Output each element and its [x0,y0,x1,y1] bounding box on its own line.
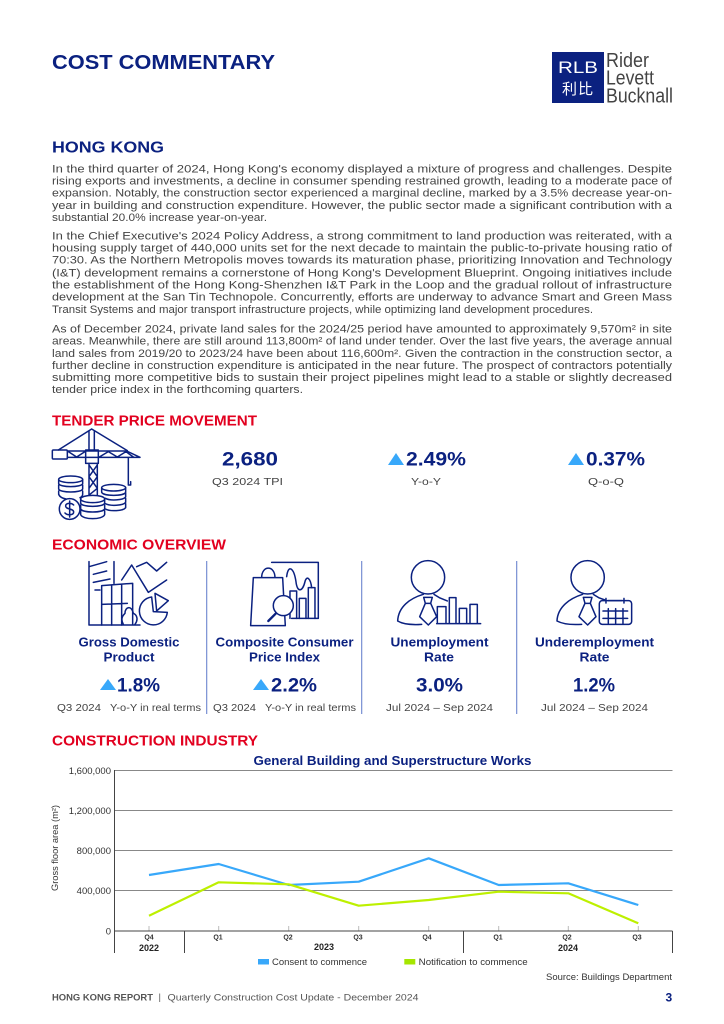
period: Jul 2024 – Sep 2024 [386,702,493,714]
stat: year on year [388,450,466,488]
footer: | [158,992,161,1003]
legend [258,957,528,968]
label: Rate [580,650,610,664]
y axis labels [69,766,111,938]
label [216,636,354,664]
label: Unemployment [390,636,489,650]
text block: paragraph 2: 70:30. As the Northern Metropolis moves towards its maturation phase, prioritizing Innovation and Technology [52,255,673,267]
panel: composite consumer price index [213,562,356,714]
logo: Rider Levett Bucknall: 利比 [562,81,593,98]
panel: underemployment rate [535,561,655,714]
label [78,636,180,664]
x axis labels: Q2 [562,934,572,942]
value: 1.8% [117,676,160,696]
icon: person with calendar [557,561,632,625]
year labels: 2022 [139,943,159,953]
series: consent to commence [149,858,638,905]
value: 3.0% [416,676,463,696]
text block: paragraph 1: rising exports and investments, a decline in consumer spending restrained growth, leading to a moderate pace of [52,176,673,188]
logo: Rider Levett Bucknall: Levett [606,68,654,90]
logo: Rider Levett Bucknall: RLB [558,59,598,77]
value [253,676,317,696]
footer: Quarterly Construction Cost Update - December 2024 [168,992,418,1004]
y axis labels: 0 [106,926,111,938]
chart: general building and superstructure works [50,754,672,968]
text block: paragraph 3: tender price index in the forthcoming quarters. [52,384,303,396]
label: Rate [424,650,454,664]
text block: paragraph 2: housing supply target of 440,000 units set for the next decade to maintain the public-to-private housing ratio of [52,243,673,255]
x axis labels [144,934,642,942]
x axis labels: Q4 [422,934,432,942]
text block: paragraph 1: year in building and construction expenditure. However, the public sector made a significant contribution with a [52,200,673,212]
text block: paragraph 1: expansion. Notably, the construction sector experienced a marginal decline, marked by a 3.5% decrease year-on- [52,188,672,200]
label [390,636,489,664]
period: Q3 2024 [57,702,101,714]
y axis labels: 800,000 [77,846,111,857]
stat: quarter on quarter: 0.37% [586,450,645,470]
period: Q3 2024 [213,702,256,714]
value: 1.2% [573,676,615,696]
stat: quarter on quarter [568,450,645,488]
text block: paragraph 3: As of December 2024, private land sales for the 2024/25 period have amounted to approximately 9,570m² in site [52,324,672,336]
text block: paragraph 2: (I&T) development remains a cornerstone of Hong Kong's Development Blueprint. Ongoing initiatives include [52,268,672,280]
label: Underemployment [535,636,655,650]
footer [52,992,418,1004]
label: Product [104,650,155,664]
heading: Hong Kong: HONG KONG [52,140,164,156]
x axis labels: Q2 [283,934,293,942]
value: 2.2% [271,676,317,696]
logo: Rider Levett Bucknall [552,50,673,108]
logo: Rider Levett Bucknall: Rider [606,50,649,72]
text block: paragraph 3: submitting more competitive bids to sustain their project pipelines might lead to a stable or slightly decreased [52,372,672,384]
x axis labels: Q3 [632,934,642,942]
panel: unemployment rate [386,561,493,714]
label: Composite Consumer [216,636,354,650]
text block: paragraph 3: further decline in construction expenditure is anticipated in the near future. The prospect of contractors potentially [52,360,673,372]
label: Gross Domestic [78,636,180,650]
text block: paragraph 3: land sales from 2019/20 to 2023/24 have been about 116,600m². Given the contraction in the construction sector, a [52,348,673,360]
heading: construction industry: CONSTRUCTION INDUSTRY [52,732,258,750]
logo: Rider Levett Bucknall: Bucknall [606,86,673,108]
period: Y-o-Y in real terms [110,702,201,714]
title: COST COMMENTARY [52,52,276,74]
period: Jul 2024 – Sep 2024 [541,702,648,714]
text block: paragraph 2: Transit Systems and major transport infrastructure projects, while optimizing land development procedures. [52,304,593,316]
y axis labels: 1,600,000 [69,766,111,777]
text block: paragraph 1 [52,164,673,224]
series: notification to commence [149,882,638,923]
text block: paragraph 3 [52,324,673,396]
text block: paragraph 2: development at the San Tin Technopole. Concurrently, efforts are underway to advance Smart and Green Mass [52,292,673,304]
chart title: General Building and Superstructure Works [254,754,532,768]
year labels [139,942,578,953]
stat: year on year: 2.49% [406,450,466,470]
x axis labels: Q3 [353,934,363,942]
y axis labels: 400,000 [77,886,111,897]
stat: TPI: Q3 2024 TPI [212,476,283,488]
year labels: 2023 [314,942,334,952]
period: Y-o-Y in real terms [265,702,356,714]
source note: Source: Buildings Department [546,972,672,983]
heading: economic overview: ECONOMIC OVERVIEW [52,536,227,554]
period [57,702,201,714]
y axis labels: 1,200,000 [69,806,111,817]
x axis labels: Q1 [493,934,503,942]
panel: gross domestic product [57,562,201,714]
icon: shopping bag and charts [251,562,318,626]
text block: paragraph 2: In the Chief Executive's 2024 Policy Address, a strong commitment to land production was reiterated, with a [52,230,673,242]
text block: paragraph 2: the establishment of the Hong Kong-Shenzhen I&T Park in the Loop and the gradual rollout of infrastructure [52,280,672,292]
page number: 3 [666,990,672,1004]
x axis labels: Q1 [213,934,223,942]
x axis labels: Q4 [144,934,154,942]
legend: Notification to commence [419,957,528,968]
heading: tender price movement: TENDER PRICE MOVEMENT [52,412,257,430]
text block: paragraph 2 [52,230,673,316]
stat: TPI [212,450,283,488]
text block: paragraph 3: areas. Meanwhile, there are still around 113,800m² of land under tender. Over the last five years, the average annual [52,336,672,348]
label [535,636,655,664]
icon: crane and coins [52,429,140,519]
icon: person with bar chart [398,561,481,625]
y axis title: Gross floor area (m²) [50,805,60,891]
icon: buildings and charts [89,562,168,625]
footer: HONG KONG REPORT [52,992,153,1004]
period [213,702,356,714]
legend: Consent to commence [272,957,367,968]
stat: quarter on quarter: Q-o-Q [588,476,624,488]
stat: year on year: Y-o-Y [411,476,441,488]
year labels: 2024 [558,943,578,953]
text block: paragraph 1: substantial 20.0% increase year-on-year. [52,212,267,224]
text block: paragraph 1: In the third quarter of 2024, Hong Kong's economy displayed a mixture of progress and challenges. Despite [52,164,672,176]
label: Price Index [249,650,320,664]
stat: TPI: 2,680 [222,450,278,470]
